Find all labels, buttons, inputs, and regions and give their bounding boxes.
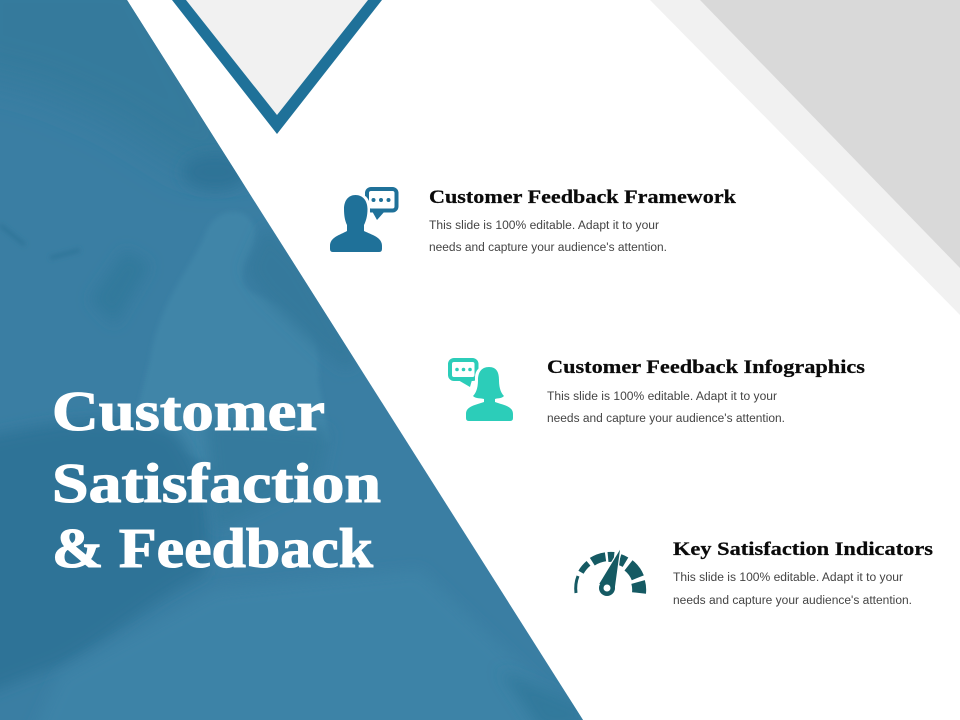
icon: man with speech bubble: [330, 189, 396, 252]
item: Key Satisfaction Indicators: [576, 539, 933, 607]
body text: needs and capture your audience's attention.: [673, 595, 912, 607]
body text: This slide is 100% editable. Adapt it to your: [547, 391, 777, 403]
body text: needs and capture your audience's attention.: [547, 413, 785, 425]
title: & Feedback: [52, 518, 374, 580]
body text: This slide is 100% editable. Adapt it to your: [429, 220, 659, 232]
heading: Key Satisfaction Indicators: [673, 539, 933, 560]
body text: needs and capture your audience's attention.: [429, 242, 667, 254]
title: Satisfaction: [52, 453, 381, 515]
decorative chevron: blue V with grey fill: [172, 0, 382, 134]
title: [52, 381, 381, 580]
item: Customer Feedback Infographics: [450, 357, 865, 425]
decorative corner: grey diagonal bands: [650, 0, 960, 315]
heading: Customer Feedback Framework: [429, 187, 736, 208]
body text: [547, 391, 785, 425]
body text: This slide is 100% editable. Adapt it to your: [673, 572, 903, 584]
icon: speedometer gauge: [576, 547, 639, 596]
heading: Customer Feedback Infographics: [547, 357, 865, 378]
body text: [429, 220, 667, 254]
title: Customer: [52, 381, 325, 443]
icon: woman with speech bubble: [450, 360, 513, 421]
item: Customer Feedback Framework: [330, 187, 736, 254]
body text: [673, 572, 912, 607]
panel: blue photo triangle: [0, 0, 600, 720]
